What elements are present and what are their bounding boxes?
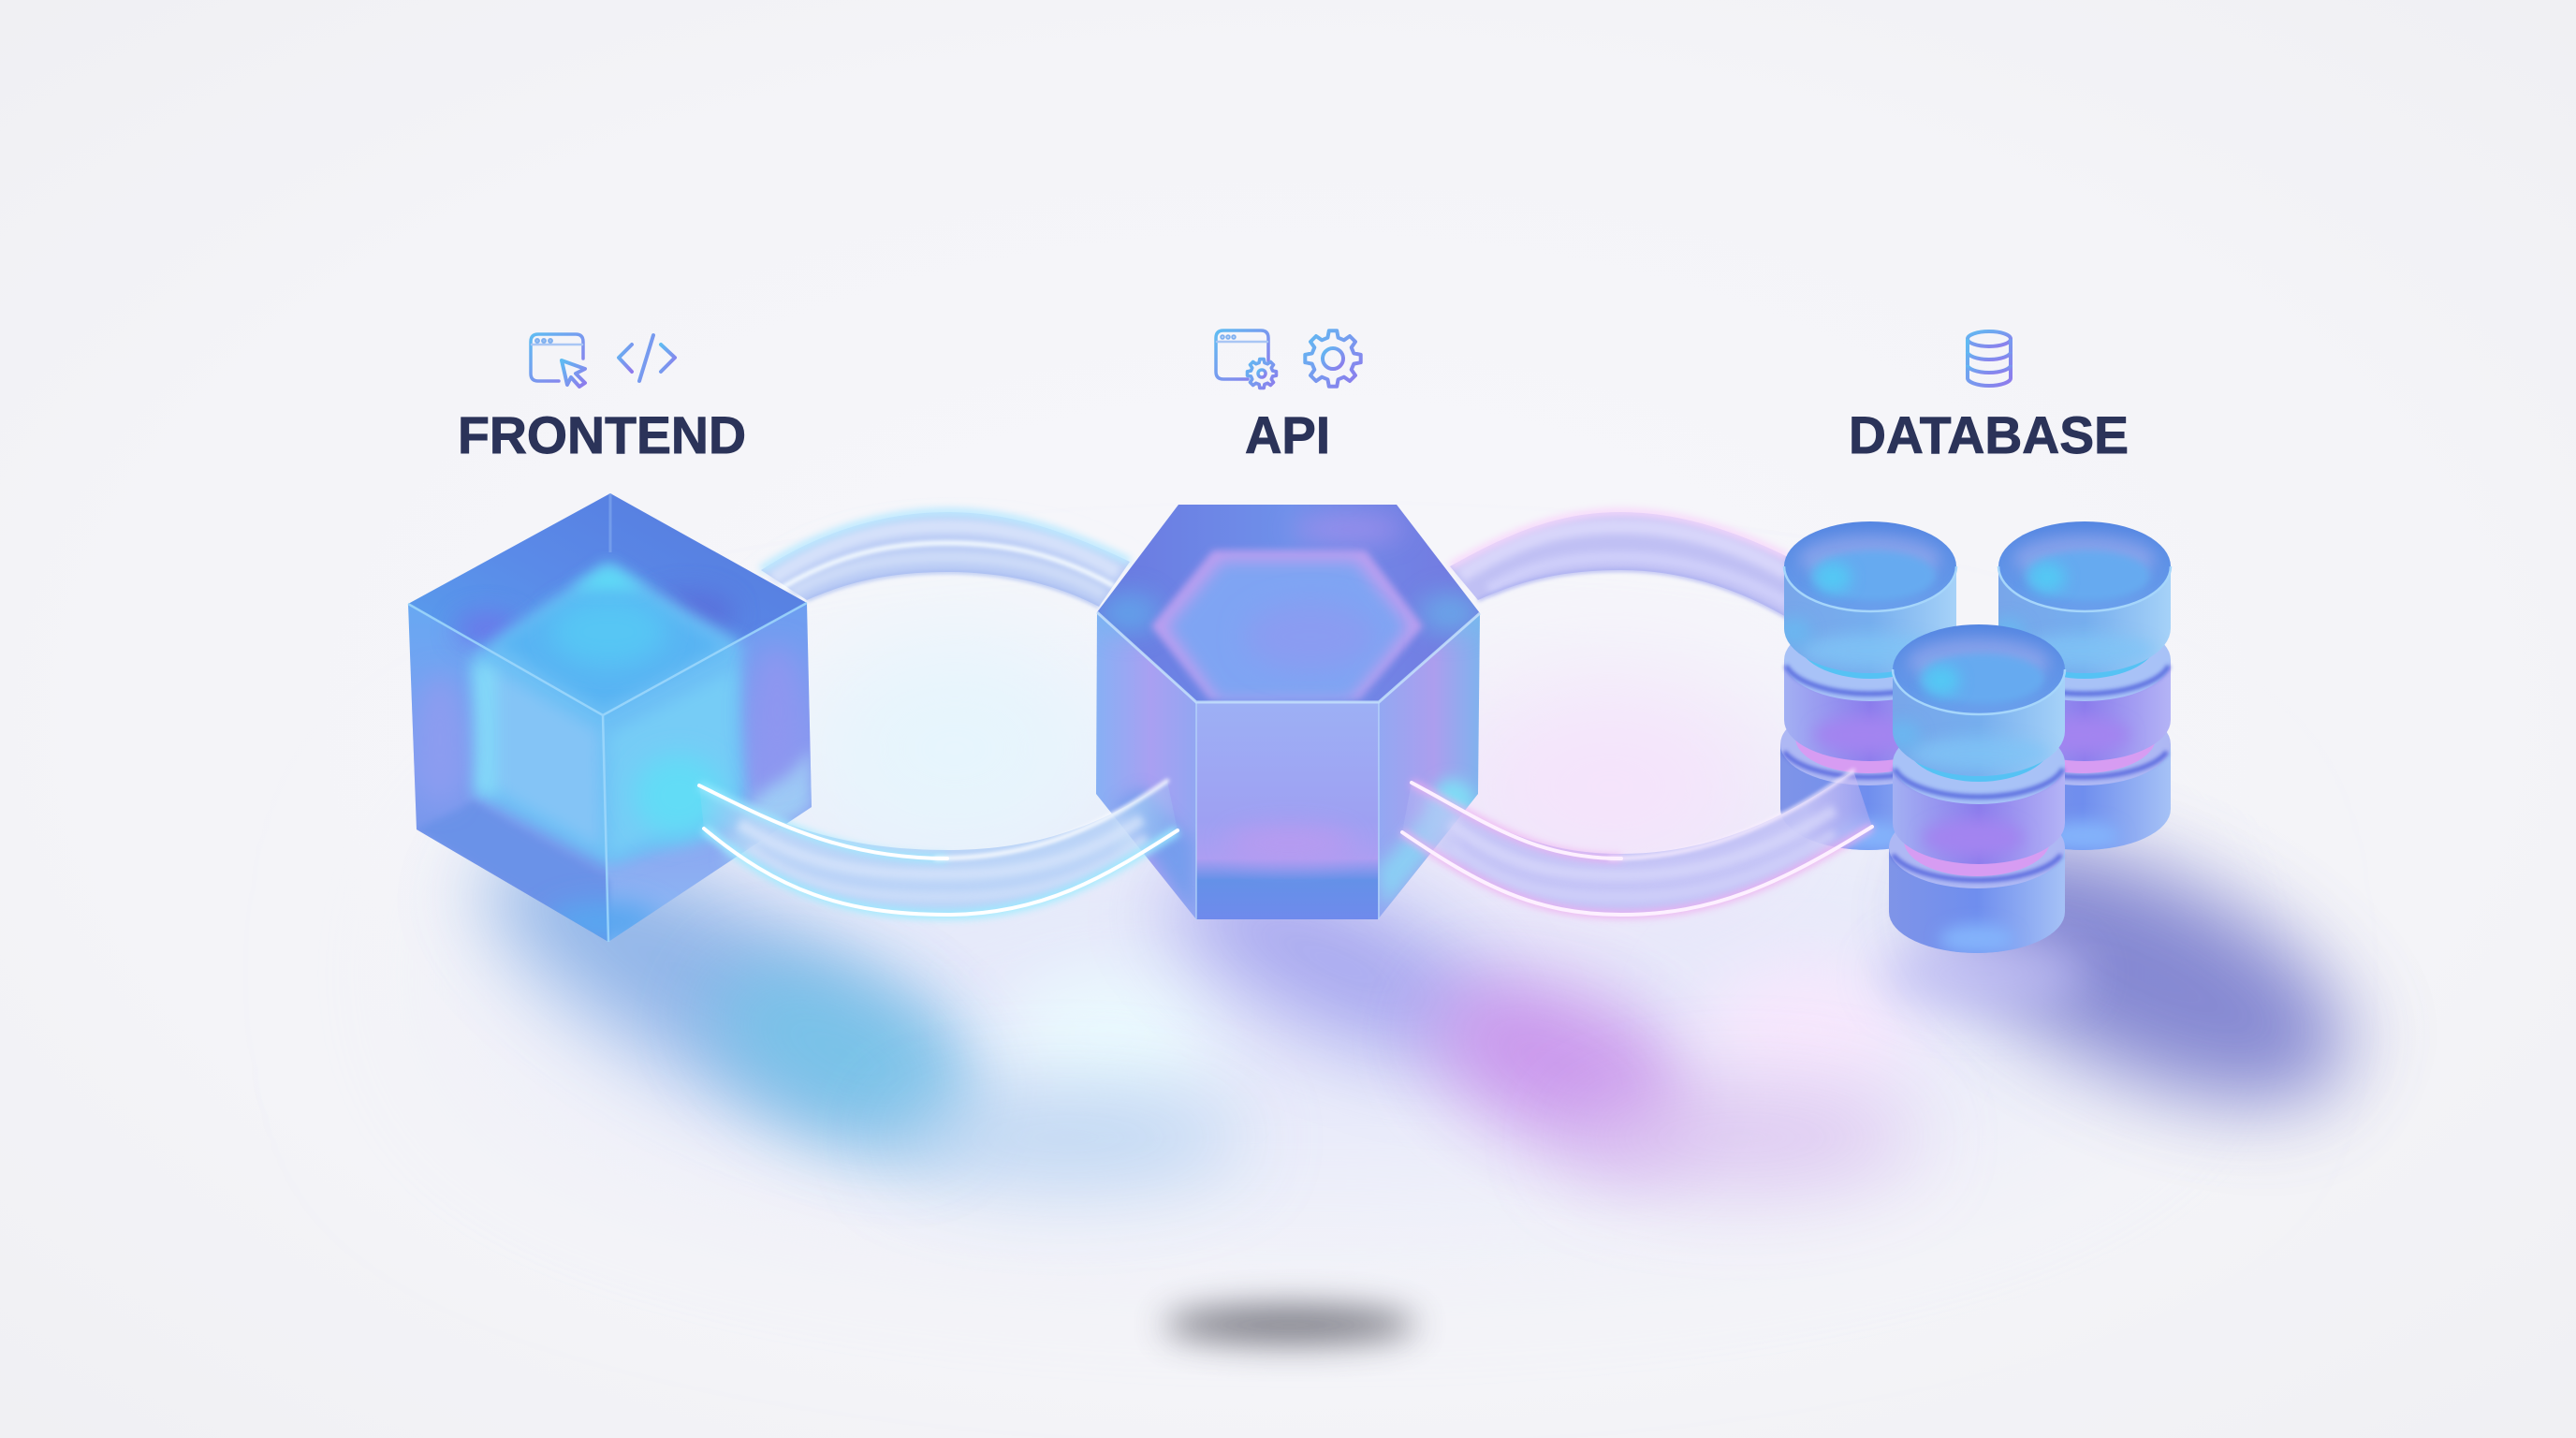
heading: FRONTEND: FRONTEND xyxy=(458,405,746,464)
left database cylinder xyxy=(1775,521,1956,851)
prism inner hexagon xyxy=(1096,514,1483,913)
cube right face xyxy=(603,603,812,942)
icon: database xyxy=(1968,331,2011,386)
cube top face xyxy=(408,493,807,715)
API glass hexagonal prism xyxy=(1096,505,1483,919)
connector tube: API to database, upper xyxy=(1450,512,1788,618)
icon: code brackets xyxy=(619,335,675,381)
cube inner glowing core xyxy=(416,564,812,943)
prism front-face glow xyxy=(1224,826,1355,859)
cube left face xyxy=(408,604,608,942)
connector tube: API to database, lower xyxy=(1402,770,1872,915)
floor shadows and coloured light xyxy=(450,627,2384,1193)
prism left face xyxy=(1096,612,1196,919)
heading: API: API xyxy=(1245,405,1330,464)
prism top face xyxy=(1097,505,1480,702)
icon: gear xyxy=(1305,330,1361,387)
frontend glass cube xyxy=(408,493,812,943)
right database cylinder xyxy=(1989,521,2171,851)
prism front face xyxy=(1196,702,1379,919)
heading: DATABASE: DATABASE xyxy=(1849,405,2129,464)
icon: browser window with gear xyxy=(1216,330,1276,388)
icon: browser window with cursor xyxy=(531,334,585,387)
connector tube: frontend to API, lower xyxy=(699,781,1178,915)
front database cylinder xyxy=(1883,624,2065,954)
hovering dark shadow xyxy=(1164,1306,1416,1343)
connector tube: frontend to API, upper xyxy=(761,512,1130,607)
prism edge highlights xyxy=(1097,612,1480,702)
prism right face xyxy=(1378,613,1480,919)
cube edge highlights xyxy=(408,603,807,942)
